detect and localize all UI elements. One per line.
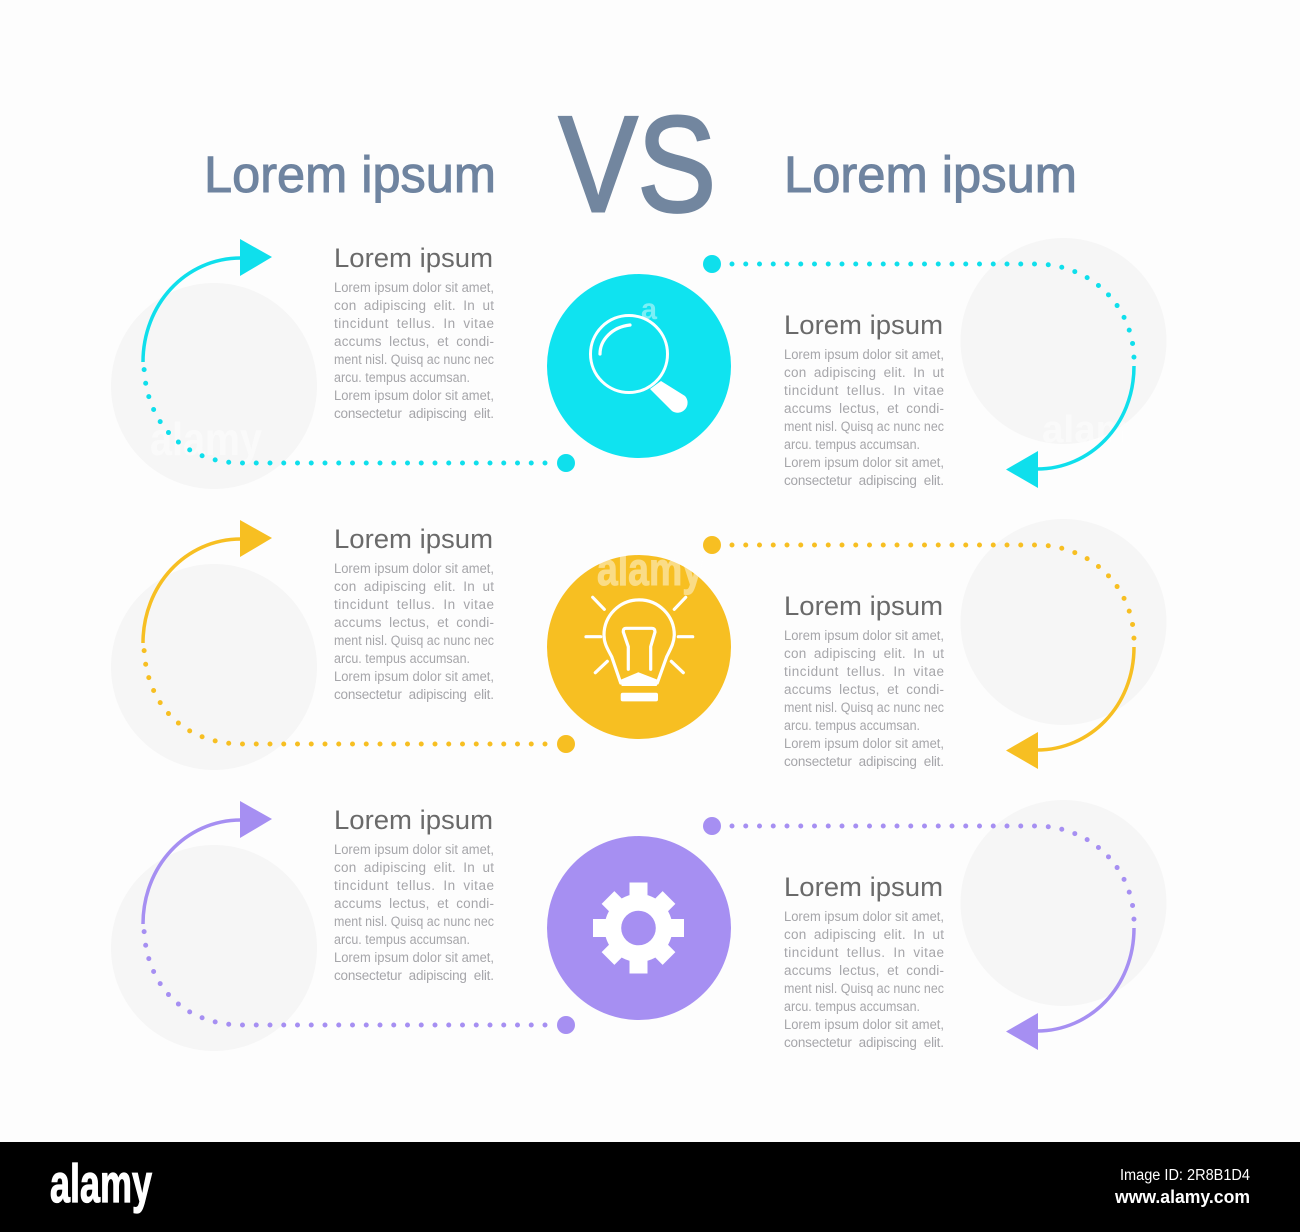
dotted connector [732, 545, 1134, 641]
text block: ment nisl. Quisq ac nunc nec [784, 700, 944, 715]
arrow: curved purple [143, 801, 272, 924]
text block: ment nisl. Quisq ac nunc nec [784, 419, 944, 434]
arrow: curved yellow [1006, 647, 1134, 769]
arrow: curved yellow [143, 520, 272, 643]
text block [334, 842, 494, 983]
text block: consectetur adipiscing elit. [334, 406, 494, 421]
text block: arcu. tempus accumsan. [334, 932, 470, 947]
text block: con adipiscing elit. In ut [784, 365, 944, 380]
text block [334, 561, 494, 702]
arrow: curved cyan [1006, 366, 1134, 488]
text block: Lorem ipsum dolor sit amet, [334, 280, 494, 295]
text block: accums lectus, et condi- [334, 334, 494, 349]
panel: right row 1 [703, 238, 1166, 488]
placeholder circle [111, 283, 317, 489]
footer url: www.alamy.com [1114, 1187, 1250, 1207]
text block: accums lectus, et condi- [784, 963, 944, 978]
text block: consectetur adipiscing elit. [784, 473, 944, 488]
panel: right row 3 [703, 800, 1166, 1050]
text block: arcu. tempus accumsan. [784, 999, 920, 1014]
text block: accums lectus, et condi- [334, 896, 494, 911]
text block: tincidunt tellus. In vitae [784, 383, 944, 398]
dotted connector [144, 929, 545, 1025]
subheading: Lorem ipsum [784, 591, 943, 621]
text block: arcu. tempus accumsan. [334, 370, 470, 385]
text block [784, 347, 944, 488]
text block: ment nisl. Quisq ac nunc nec [334, 633, 494, 648]
text block: consectetur adipiscing elit. [334, 968, 494, 983]
dotted connector [732, 264, 1134, 360]
panel: right row 2 [703, 519, 1166, 769]
icon: magnifier in cyan circle [547, 274, 731, 458]
text block: tincidunt tellus. In vitae [784, 945, 944, 960]
panel: left row 3 [111, 801, 575, 1051]
text block: ment nisl. Quisq ac nunc nec [784, 981, 944, 996]
text block: con adipiscing elit. In ut [784, 646, 944, 661]
arrow: curved cyan [143, 239, 272, 362]
text block: Lorem ipsum dolor sit amet, [334, 388, 494, 403]
placeholder circle [111, 845, 317, 1051]
text block: accums lectus, et condi- [784, 401, 944, 416]
text block: arcu. tempus accumsan. [784, 718, 920, 733]
text block: Lorem ipsum dolor sit amet, [334, 561, 494, 576]
icon: gear in purple circle [547, 836, 731, 1020]
text block: Lorem ipsum dolor sit amet, [784, 347, 944, 362]
connector start dot [703, 817, 721, 835]
text block: Lorem ipsum dolor sit amet, [784, 628, 944, 643]
placeholder circle [111, 564, 317, 770]
text block: accums lectus, et condi- [334, 615, 494, 630]
subheading: Lorem ipsum [784, 310, 943, 340]
text block: Lorem ipsum dolor sit amet, [784, 736, 944, 751]
text block [784, 628, 944, 769]
left heading: Lorem ipsum [204, 146, 496, 203]
text block: tincidunt tellus. In vitae [334, 316, 494, 331]
text block: Lorem ipsum dolor sit amet, [334, 669, 494, 684]
text block: consectetur adipiscing elit. [334, 687, 494, 702]
text block: tincidunt tellus. In vitae [334, 597, 494, 612]
VS title: VS [559, 88, 716, 240]
text block: tincidunt tellus. In vitae [334, 878, 494, 893]
text block [784, 909, 944, 1050]
text block: con adipiscing elit. In ut [334, 298, 494, 313]
text block [334, 280, 494, 421]
footer logo: alamy [50, 1154, 152, 1214]
text block: consectetur adipiscing elit. [784, 1035, 944, 1050]
icon: light bulb in yellow circle [547, 543, 731, 739]
subheading: Lorem ipsum [334, 524, 493, 554]
text block: ment nisl. Quisq ac nunc nec [334, 914, 494, 929]
text block: arcu. tempus accumsan. [334, 651, 470, 666]
text block: accums lectus, et condi- [784, 682, 944, 697]
panel: left row 1 [111, 239, 575, 489]
watermark: alamy [150, 413, 262, 465]
right heading: Lorem ipsum [784, 146, 1077, 203]
connector end dot [557, 454, 575, 472]
text block: con adipiscing elit. In ut [334, 860, 494, 875]
watermark: alam [1042, 409, 1130, 451]
text block: Lorem ipsum dolor sit amet, [334, 950, 494, 965]
placeholder circle [960, 238, 1166, 444]
icon: magnifier in cyan circle: a [641, 293, 657, 326]
arrow: curved purple [1006, 928, 1134, 1050]
placeholder circle [960, 800, 1166, 1006]
text block: con adipiscing elit. In ut [784, 927, 944, 942]
subheading: Lorem ipsum [784, 872, 943, 902]
icon: light bulb in yellow circle: alamy [597, 543, 703, 595]
text block: arcu. tempus accumsan. [784, 437, 920, 452]
panel: left row 2 [111, 520, 575, 770]
text block: Lorem ipsum dolor sit amet, [784, 1017, 944, 1032]
subheading: Lorem ipsum [334, 243, 493, 273]
text block: consectetur adipiscing elit. [784, 754, 944, 769]
text block: Lorem ipsum dolor sit amet, [784, 455, 944, 470]
dotted connector [144, 648, 545, 744]
dotted connector [144, 367, 545, 463]
subheading: Lorem ipsum [334, 805, 493, 835]
connector end dot [557, 735, 575, 753]
connector start dot [703, 536, 721, 554]
text block: con adipiscing elit. In ut [334, 579, 494, 594]
text block: Lorem ipsum dolor sit amet, [334, 842, 494, 857]
text block: ment nisl. Quisq ac nunc nec [334, 352, 494, 367]
text block: Lorem ipsum dolor sit amet, [784, 909, 944, 924]
connector start dot [703, 255, 721, 273]
placeholder circle [960, 519, 1166, 725]
text block: tincidunt tellus. In vitae [784, 664, 944, 679]
dotted connector [732, 826, 1134, 922]
image id: Image ID: 2R8B1D4 [1120, 1167, 1250, 1184]
connector end dot [557, 1016, 575, 1034]
footer bar [0, 1142, 1300, 1232]
